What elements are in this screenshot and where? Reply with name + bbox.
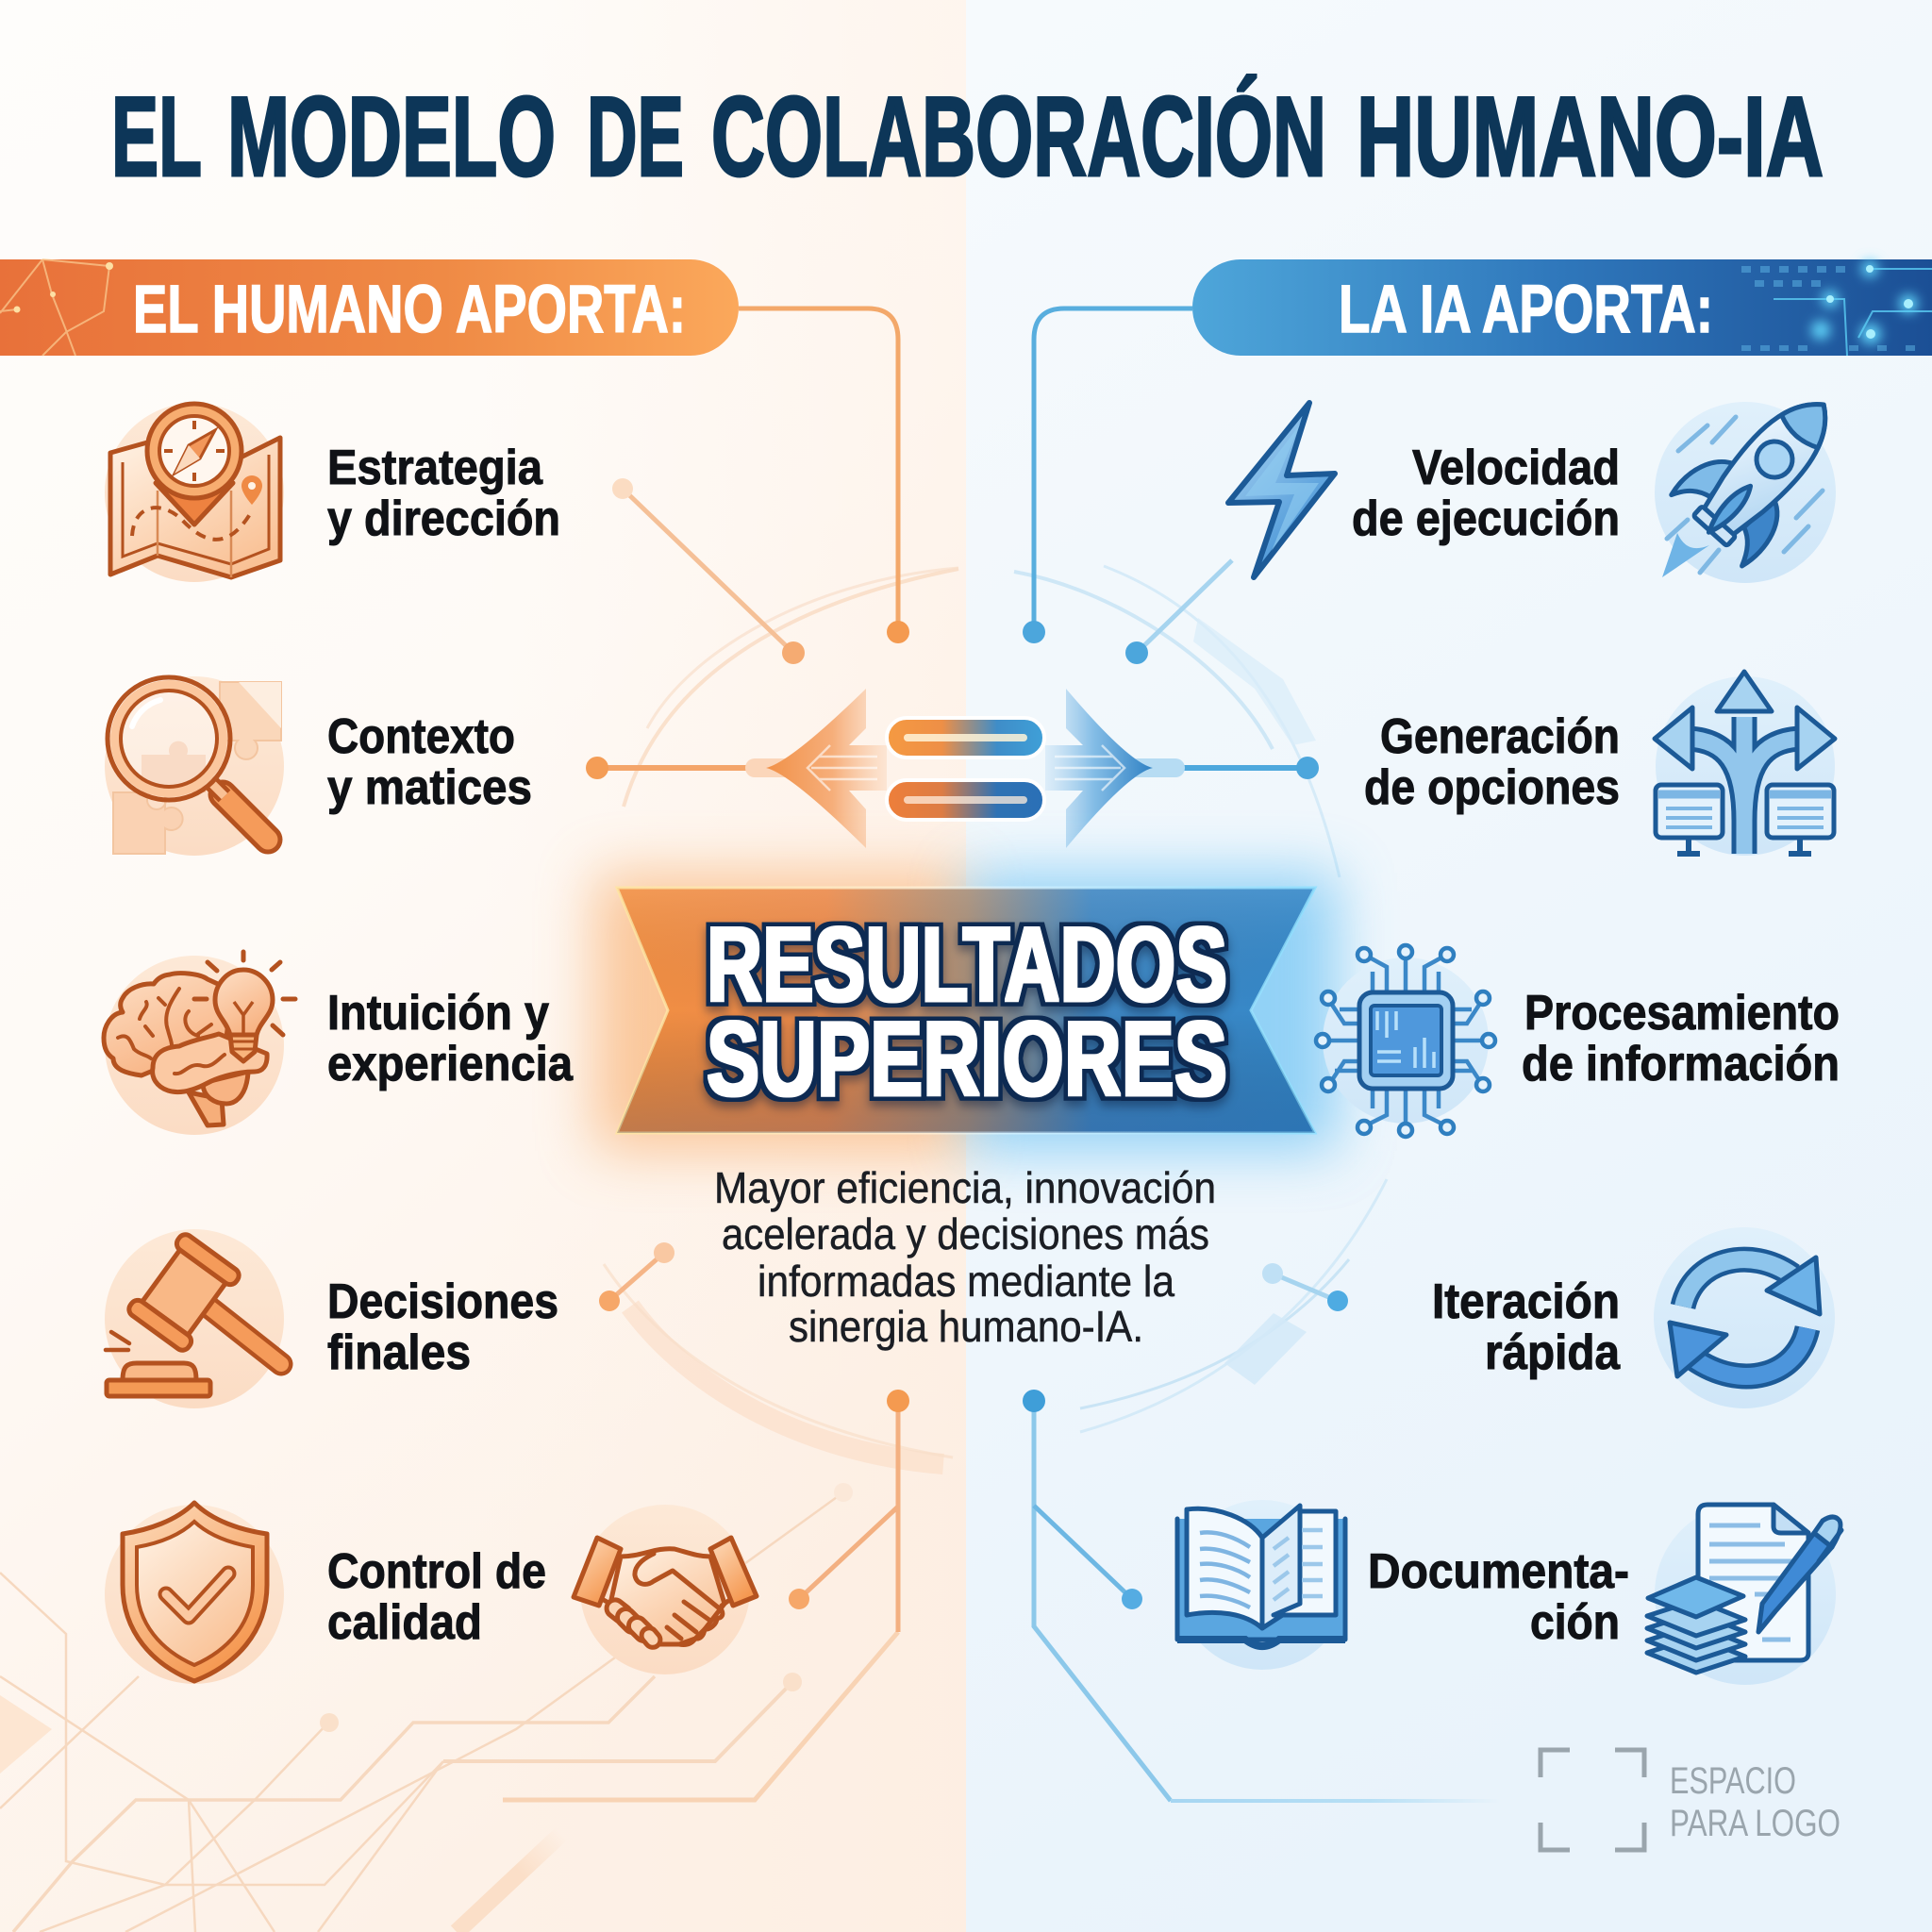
- banner text: SUPERIORES: [707, 1000, 1227, 1118]
- connector: faded blue upper: [1125, 560, 1232, 664]
- center symbol: arrows and equals: [586, 689, 1319, 848]
- connector: faded orange upper: [612, 478, 805, 664]
- description paragraph: informadas mediante la: [758, 1257, 1174, 1306]
- label: documentación: Documenta-: [1368, 1544, 1629, 1599]
- label: decisiones finales: Decisiones: [327, 1274, 558, 1329]
- icon: branching arrows and monitors: [1655, 672, 1835, 856]
- header: el humano aporta: [0, 259, 739, 356]
- icon: document, pages and pen: [1647, 1504, 1841, 1685]
- title: EL: [111, 74, 202, 200]
- label: iteración rápida: rápida: [1485, 1325, 1621, 1380]
- icon: gavel: [105, 1229, 284, 1408]
- label: intuición y experiencia: [327, 986, 574, 1091]
- label: intuición y experiencia: experiencia: [327, 1037, 574, 1091]
- icon: rocket: [1655, 369, 1861, 583]
- description paragraph: Mayor eficiencia, innovación: [714, 1163, 1216, 1212]
- heading text: LA IA APORTA:: [1339, 273, 1713, 347]
- title: [111, 74, 1824, 200]
- label: procesamiento de información: Procesamiento: [1524, 986, 1840, 1041]
- label: decisiones finales: [327, 1274, 558, 1380]
- header: la ia aporta: [1192, 259, 1932, 356]
- label: estrategia y dirección: Estrategia: [327, 441, 543, 495]
- background arcs: upper: [624, 566, 1340, 877]
- connector: orange bottom: [789, 1390, 909, 1632]
- label: generación de opciones: de opciones: [1364, 760, 1620, 815]
- label: contexto y matices: Contexto: [327, 709, 515, 764]
- label: contexto y matices: y matices: [327, 760, 532, 815]
- title: MODELO: [227, 74, 556, 200]
- equals pills: [887, 718, 1044, 758]
- icon: map and compass: [105, 403, 284, 582]
- icon: brain and light bulb: [104, 952, 295, 1135]
- label: iteración rápida: Iteración: [1432, 1274, 1620, 1329]
- connector: lower left small: [599, 1242, 675, 1311]
- label: generación de opciones: [1364, 709, 1620, 815]
- connector: blue bottom: [1023, 1390, 1500, 1803]
- label: procesamiento de información: [1522, 986, 1840, 1091]
- logo placeholder: PARA LOGO: [1670, 1803, 1840, 1844]
- heading text: EL HUMANO APORTA:: [133, 273, 686, 347]
- icon: shield: [105, 1503, 284, 1684]
- background arcs: lower: [604, 1179, 1387, 1464]
- label: velocidad de ejecución: de ejecución: [1352, 491, 1620, 546]
- logo placeholder: [1541, 1750, 1840, 1850]
- banner text: RESULTADOS: [707, 906, 1227, 1024]
- description paragraph: acelerada y decisiones más: [722, 1209, 1209, 1258]
- label: control de calidad: calidad: [327, 1595, 482, 1650]
- icon: chip: [1316, 945, 1495, 1137]
- description paragraph: [714, 1163, 1216, 1351]
- icon: refresh cycle: [1654, 1227, 1835, 1408]
- label: decisiones finales: finales: [327, 1325, 471, 1380]
- description paragraph: sinergia humano-IA.: [789, 1302, 1143, 1351]
- left arrow: [586, 689, 887, 848]
- label: documentación: ción: [1530, 1595, 1620, 1650]
- title: DE: [587, 74, 684, 200]
- label: intuición y experiencia: Intuición y: [327, 986, 549, 1041]
- connector: human header to center: [739, 308, 909, 643]
- label: control de calidad: [327, 1544, 546, 1650]
- banner text: [707, 906, 1227, 1118]
- icon: magnifier and puzzle: [105, 676, 284, 856]
- logo placeholder: ESPACIO: [1670, 1760, 1796, 1802]
- label: procesamiento de información: de información: [1522, 1037, 1840, 1091]
- icon: handshake: [574, 1505, 757, 1674]
- connector: ia header to center: [1023, 308, 1192, 643]
- banner: resultados superiores: [594, 873, 1338, 1151]
- title: COLABORACIÓN: [711, 74, 1326, 200]
- decorative diamond and diagonal: [0, 1695, 562, 1932]
- label: iteración rápida: [1432, 1274, 1621, 1380]
- label: generación de opciones: Generación: [1380, 709, 1620, 764]
- icon: lightning bolt: [1228, 403, 1335, 577]
- label: contexto y matices: [327, 709, 532, 815]
- circuit pattern: bottom left: [0, 1483, 898, 1932]
- label: velocidad de ejecución: [1352, 441, 1620, 546]
- right arrow: [1045, 689, 1319, 848]
- label: estrategia y dirección: y dirección: [327, 491, 560, 546]
- connector: lower right small: [1262, 1263, 1348, 1311]
- icon: open book: [1177, 1500, 1347, 1670]
- label: velocidad de ejecución: Velocidad: [1412, 441, 1620, 495]
- label: control de calidad: Control de: [327, 1544, 546, 1599]
- label: estrategia y dirección: [327, 441, 560, 546]
- label: documentación: [1368, 1544, 1629, 1650]
